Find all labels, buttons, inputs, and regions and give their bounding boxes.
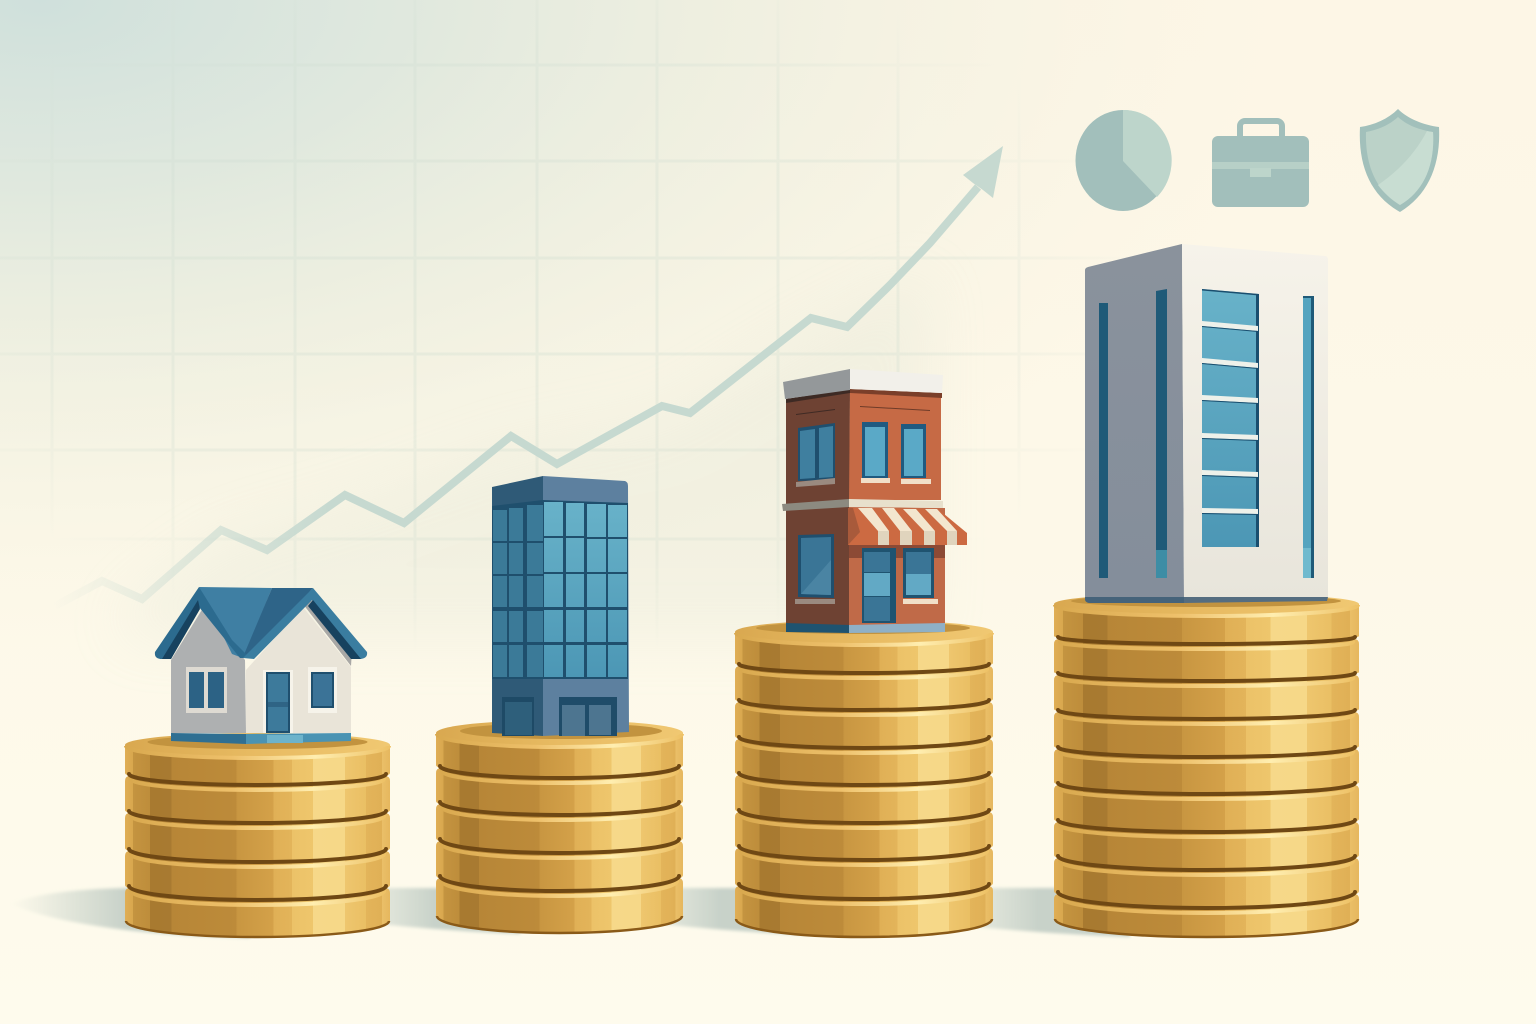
office tower — [492, 476, 629, 736]
trend area shading — [120, 270, 930, 640]
shop walls — [786, 390, 945, 625]
house right window — [308, 667, 337, 713]
shop lower left window — [795, 534, 835, 604]
coin stack 1 — [125, 733, 390, 937]
tower left face — [492, 476, 543, 736]
coin stack 3 — [735, 620, 993, 937]
icon: shield — [1360, 109, 1439, 212]
shop awning — [848, 508, 967, 545]
shop building — [782, 369, 967, 633]
shop upper left window — [796, 423, 835, 487]
shop roof — [783, 369, 943, 399]
house base — [171, 733, 351, 744]
left slit windows — [1099, 289, 1167, 578]
tower doors — [502, 697, 617, 736]
house roof — [155, 587, 367, 659]
house door — [263, 670, 293, 733]
coin stack 4 — [1054, 593, 1359, 937]
shop right window — [903, 548, 938, 604]
central window block — [1202, 289, 1259, 547]
tall building left face — [1085, 244, 1184, 598]
growth arrow — [55, 146, 1003, 606]
shop door — [862, 548, 896, 623]
floor shadows — [10, 888, 1130, 938]
tower glass frame — [492, 500, 628, 679]
house left window — [186, 667, 227, 713]
right slit window — [1303, 296, 1314, 578]
tower right glass — [544, 502, 627, 677]
shop cornice — [786, 389, 942, 415]
icon: pie chart — [1076, 110, 1172, 211]
tall building base — [1085, 597, 1328, 603]
shop floor band — [782, 499, 943, 511]
tall building right face — [1182, 244, 1328, 598]
chart grid — [0, 0, 1160, 660]
shop base — [786, 623, 945, 633]
shop upper right windows — [861, 422, 931, 484]
icon: briefcase — [1212, 121, 1309, 207]
coin stack 2 — [436, 720, 683, 933]
tall building — [1085, 244, 1328, 603]
house right wall — [246, 607, 351, 733]
tower right face — [543, 476, 629, 736]
house left wall — [171, 608, 246, 733]
tower left glass — [493, 505, 543, 677]
house — [155, 587, 367, 744]
